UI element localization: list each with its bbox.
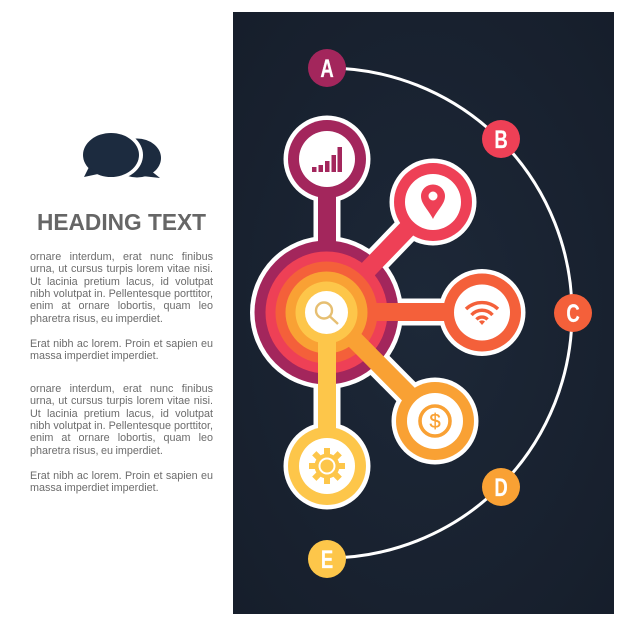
text: ornare interdum, erat nunc finibus xyxy=(30,383,213,395)
icon: map pin xyxy=(421,184,445,219)
text: pharetra risus, eu imperdiet. xyxy=(30,313,163,325)
text: massa imperdiet imperdiet. xyxy=(30,350,159,362)
badge E xyxy=(308,540,346,578)
text: Ut lacinia pretium lacus, id volutpat xyxy=(30,408,213,420)
badge D: D xyxy=(494,473,508,502)
icon: magnifier xyxy=(316,302,338,324)
text: Ut lacinia pretium lacus, id volutpat xyxy=(30,276,213,288)
icon: signal bars xyxy=(312,147,342,172)
hub ring: red xyxy=(266,252,388,374)
text: urna, ut cursus turpis lorem vitae nisi. xyxy=(30,263,213,275)
text: nibh volutpat in. Pellentesque porttitor, xyxy=(30,288,213,300)
icon: speech bubbles xyxy=(79,130,161,180)
hub ring: amber xyxy=(286,272,368,354)
text: urna, ut cursus turpis lorem vitae nisi. xyxy=(30,395,213,407)
badge B: B xyxy=(494,125,508,154)
white outline of hub and nodes xyxy=(250,116,526,510)
hub centre: search xyxy=(305,291,348,334)
icon: dollar coin: $ xyxy=(429,411,441,433)
node: signal (magenta) xyxy=(288,120,366,312)
badge C: C xyxy=(566,299,580,328)
node: location (red) xyxy=(327,163,472,312)
heading: HEADING TEXT xyxy=(37,209,206,235)
hub ring: magenta xyxy=(254,240,398,384)
text: ornare interdum, erat nunc finibus xyxy=(30,251,213,263)
arc timeline xyxy=(327,68,572,558)
node: gear (yellow) xyxy=(288,312,366,505)
text: enim at ornare lobortis, quam leo xyxy=(30,300,213,312)
badge E: E xyxy=(321,545,333,574)
text block: fourth paragraph xyxy=(30,470,213,494)
text: Erat nibh ac lorem. Proin et sapien eu xyxy=(30,338,213,350)
node: wifi (orange) xyxy=(327,274,521,352)
badge C xyxy=(554,294,592,332)
text block: third paragraph xyxy=(30,383,213,457)
icon: dollar coin xyxy=(420,406,450,436)
icon: gear xyxy=(309,448,345,484)
node: dollar (amber) xyxy=(327,312,474,460)
icon: wifi xyxy=(466,303,498,325)
badge A xyxy=(308,49,346,87)
text: massa imperdiet imperdiet. xyxy=(30,482,159,494)
text: pharetra risus, eu imperdiet. xyxy=(30,445,163,457)
badge B xyxy=(482,120,520,158)
text block: second paragraph xyxy=(30,338,213,362)
text: enim at ornare lobortis, quam leo xyxy=(30,432,213,444)
badge D xyxy=(482,468,520,506)
hub ring: yellow xyxy=(296,282,358,344)
badge A: A xyxy=(320,54,334,83)
text: Erat nibh ac lorem. Proin et sapien eu xyxy=(30,470,213,482)
text block: first paragraph xyxy=(30,251,213,325)
text: nibh volutpat in. Pellentesque porttitor, xyxy=(30,420,213,432)
hub ring: orange xyxy=(276,262,378,364)
